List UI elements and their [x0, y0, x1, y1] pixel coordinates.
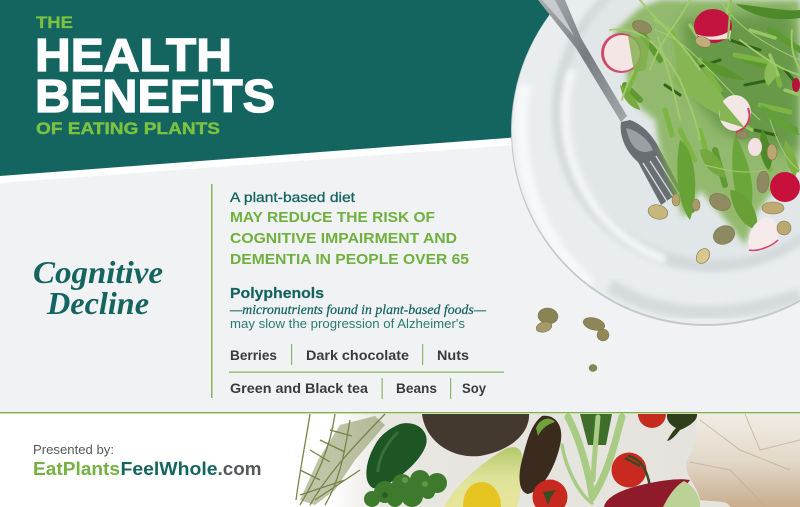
- risk line one: MAY REDUCE THE RISK OF: [230, 209, 435, 226]
- marble surface: [330, 414, 800, 507]
- pumpkin seeds on plate: [631, 18, 791, 266]
- dark pepper: [520, 416, 561, 494]
- polyphenols heading: Polyphenols: [230, 285, 324, 302]
- food: soy: Soy: [462, 381, 486, 396]
- food: nuts: Nuts: [437, 348, 469, 363]
- footer band: [0, 412, 800, 507]
- small avocado: [663, 481, 700, 507]
- food: beans: Beans: [396, 381, 437, 396]
- website url: [33, 458, 262, 479]
- title: [35, 13, 275, 138]
- avocado half: [444, 447, 523, 507]
- section heading: cognitive decline: [33, 254, 163, 321]
- food list: [229, 344, 504, 399]
- fork: [538, 0, 681, 205]
- red pepper: [604, 479, 690, 507]
- whole avocado: [422, 414, 529, 456]
- polyphenols definition: —micronutrients found in plant-based foods—: [229, 303, 487, 318]
- intro line: A plant-based diet: [230, 189, 355, 205]
- title line: health: HEALTH: [35, 29, 232, 81]
- footer vegetables photo: [296, 414, 800, 507]
- title line: of eating plants: OF EATING PLANTS: [36, 119, 220, 138]
- risk line two: COGNITIVE IMPAIRMENT AND: [230, 230, 457, 247]
- green pepper: [366, 423, 427, 488]
- risk line three: DEMENTIA IN PEOPLE OVER 65: [230, 251, 469, 268]
- plate: [511, 0, 800, 326]
- heading line: decline: Decline: [46, 285, 149, 321]
- url part: dot com: .com: [218, 458, 262, 479]
- salad greens: [610, 0, 800, 245]
- risk statement: [230, 189, 469, 268]
- vertical divider: [211, 184, 212, 398]
- presenter credit: [33, 443, 262, 479]
- title line: benefits: BENEFITS: [35, 70, 275, 122]
- url part: feelwhole: FeelWhole: [120, 458, 218, 479]
- herb sprigs: [296, 414, 385, 505]
- tomato middle: [612, 452, 650, 488]
- radishes: [601, 0, 800, 250]
- tomato top: [638, 414, 666, 428]
- plate with salad: [511, 0, 800, 326]
- scattered pumpkin seeds: [535, 307, 609, 372]
- url part: eatplants: EatPlants: [33, 458, 120, 479]
- food: berries: Berries: [230, 348, 277, 363]
- crumpled paper: [686, 414, 800, 507]
- kale: [364, 470, 447, 507]
- green stems: [562, 414, 622, 503]
- polyphenols effect: may slow the progression of Alzheimer's: [230, 317, 465, 331]
- heading line: cognitive: Cognitive: [33, 254, 163, 290]
- header banner: [0, 0, 800, 183]
- food: dark chocolate: Dark chocolate: [306, 348, 410, 363]
- title line: the: THE: [36, 13, 73, 32]
- tomato bottom: [533, 480, 568, 507]
- food: green and black tea: Green and Black tea: [230, 381, 369, 396]
- polyphenols text: [229, 285, 487, 331]
- presented by label: Presented by:: [33, 443, 114, 457]
- dark green pepper top: [667, 414, 697, 441]
